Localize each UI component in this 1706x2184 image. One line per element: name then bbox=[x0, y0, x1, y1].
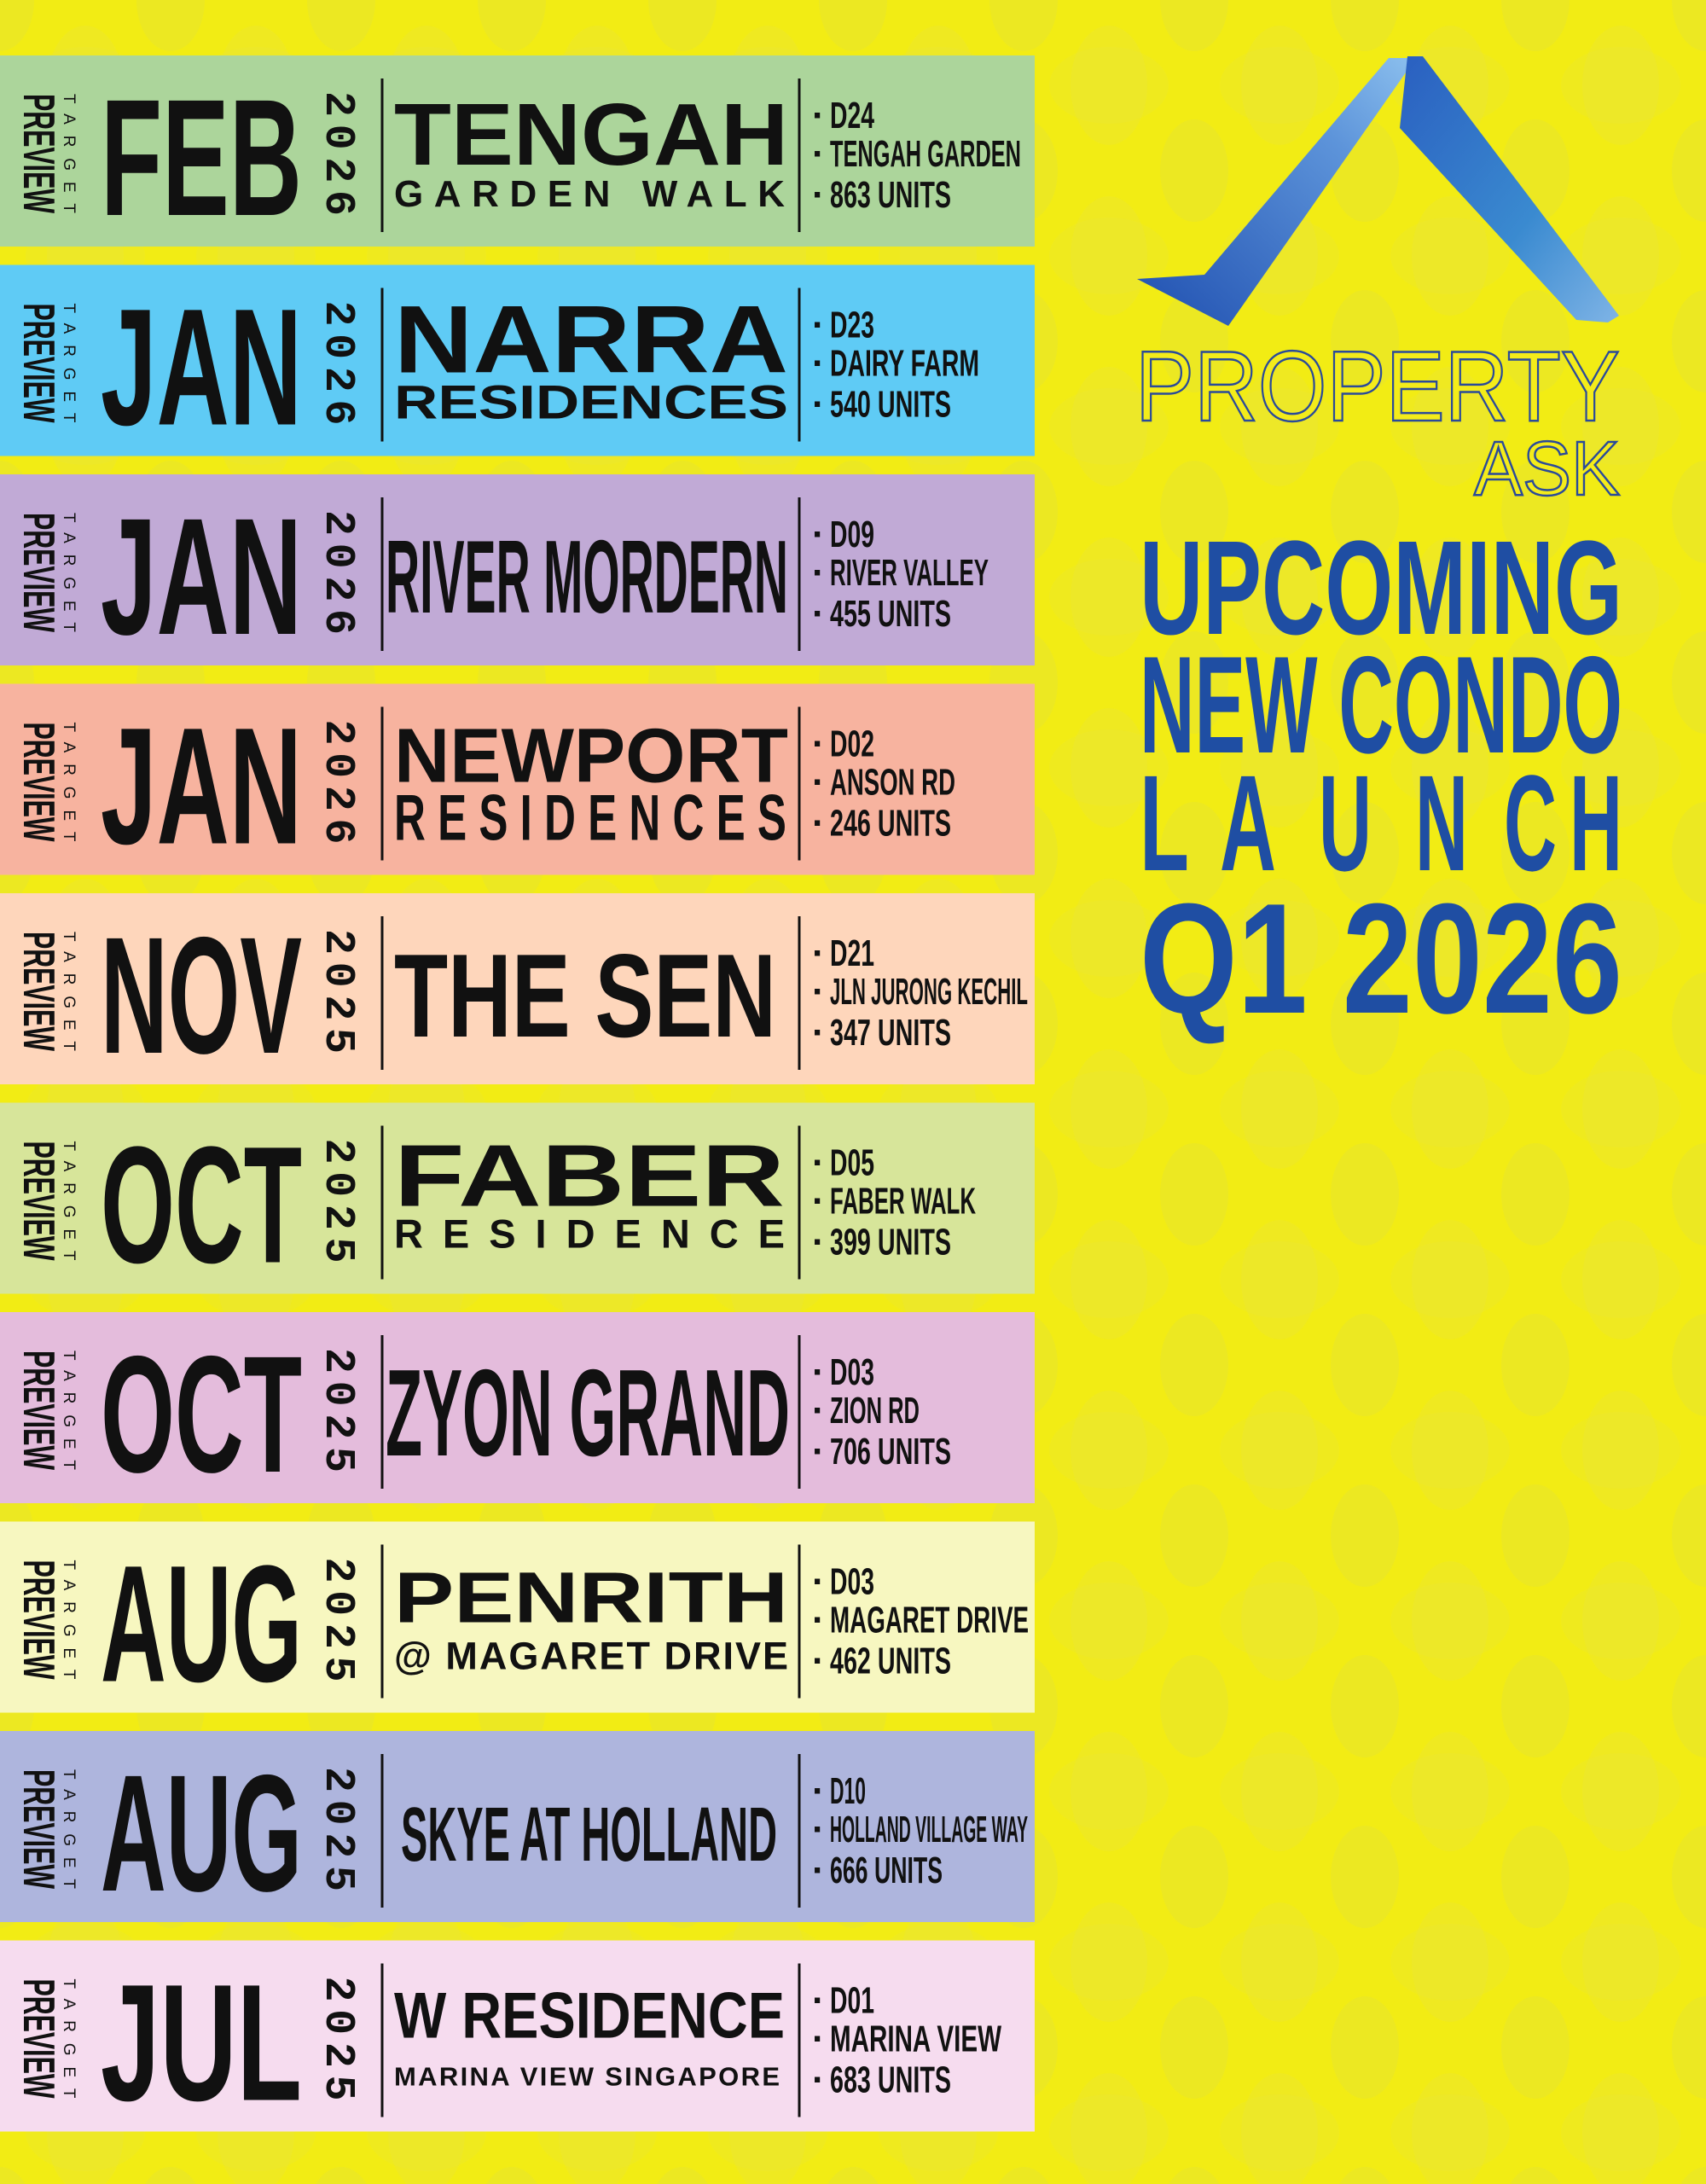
row: Skye at Holland: · bbox=[812, 1850, 825, 1891]
row: Newport Residences: ANSON RD bbox=[830, 761, 955, 804]
row: Skye at Holland: 666 UNITS bbox=[830, 1850, 943, 1891]
row: The Sen: · bbox=[812, 971, 825, 1013]
row: Narra Residences: 2026 bbox=[313, 300, 362, 425]
row: Newport Residences: · bbox=[812, 723, 825, 764]
row: Tengah Garden Walk: D24 bbox=[830, 95, 874, 136]
row: Penrith: @ MAGARET DRIVE bbox=[394, 1635, 788, 1677]
row: Penrith: · bbox=[812, 1640, 825, 1682]
row: Faber Residence: FABER bbox=[394, 1126, 785, 1225]
row: W Residence: TARGET bbox=[60, 1979, 78, 2099]
row: Tengah Garden Walk: · bbox=[812, 133, 825, 175]
headline: H bbox=[1570, 746, 1622, 899]
row: W Residence: · bbox=[812, 2059, 825, 2100]
row: Newport Residences: JAN bbox=[101, 693, 302, 879]
row: W Residence: 2025 bbox=[313, 1976, 362, 2100]
row: Penrith: MAGARET DRIVE bbox=[830, 1599, 1029, 1641]
row: W Residence: PREVIEW bbox=[14, 1979, 63, 2099]
row: Faber Residence: OCT bbox=[101, 1112, 302, 1298]
row: Newport Residences: TARGET bbox=[60, 722, 78, 842]
row: Zyon Grand: OCT bbox=[101, 1321, 302, 1507]
row: W Residence: JUL bbox=[101, 1950, 302, 2136]
row: W Residence: · bbox=[812, 2018, 825, 2059]
row: Skye at Holland: PREVIEW bbox=[14, 1769, 63, 1890]
row: Zyon Grand: ZYON GRAND bbox=[386, 1344, 790, 1482]
row: Zyon Grand bbox=[0, 1312, 1035, 1507]
row: Zyon Grand: ZION RD bbox=[830, 1390, 920, 1432]
row: Narra Residences bbox=[0, 264, 1035, 461]
headline: L bbox=[1140, 746, 1189, 899]
row: Newport Residences: R E S I D E N C E S bbox=[394, 781, 786, 855]
row: River Mordern: · bbox=[812, 593, 825, 635]
row: W Residence: D01 bbox=[830, 1979, 874, 2022]
row: The Sen: PREVIEW bbox=[14, 932, 63, 1052]
logo text: PROPERTY ASK: PROPERTY bbox=[1135, 330, 1620, 442]
row: Newport Residences: 246 UNITS bbox=[830, 802, 951, 845]
row: Skye at Holland: D10 bbox=[830, 1770, 866, 1812]
row: Penrith: · bbox=[812, 1599, 825, 1641]
row: River Mordern bbox=[0, 474, 1035, 670]
row: Narra Residences: · bbox=[812, 304, 825, 346]
row: Zyon Grand: · bbox=[812, 1390, 825, 1432]
row: River Mordern: D09 bbox=[830, 514, 874, 555]
row: Tengah Garden Walk: 863 UNITS bbox=[830, 174, 951, 216]
row: The Sen bbox=[0, 893, 1035, 1089]
row: River Mordern: PREVIEW bbox=[14, 513, 63, 633]
row: Penrith: PENRITH bbox=[394, 1558, 788, 1638]
row: Zyon Grand: TARGET bbox=[60, 1350, 78, 1470]
row: Newport Residences bbox=[0, 684, 1035, 879]
row: The Sen: JLN JURONG KECHIL bbox=[830, 971, 1028, 1013]
row: W Residence: MARINA VIEW SINGAPORE bbox=[394, 2061, 780, 2092]
row: Tengah Garden Walk: TENGAH bbox=[394, 85, 788, 183]
headline bbox=[1140, 514, 1622, 1046]
row: Faber Residence bbox=[0, 1102, 1035, 1298]
headline: A bbox=[1220, 746, 1276, 899]
row: Faber Residence: RESIDENCE bbox=[394, 1211, 785, 1256]
row: The Sen: THE SEN bbox=[394, 930, 776, 1062]
row: Skye at Holland: 2025 bbox=[313, 1767, 362, 1891]
row: Newport Residences: D02 bbox=[830, 723, 874, 764]
row: Zyon Grand: · bbox=[812, 1431, 825, 1472]
row: Faber Residence: TARGET bbox=[60, 1141, 78, 1261]
row: W Residence: · bbox=[812, 1979, 825, 2022]
headline: N bbox=[1415, 746, 1468, 899]
row: Faber Residence: 399 UNITS bbox=[830, 1222, 951, 1263]
row: Faber Residence: · bbox=[812, 1181, 825, 1222]
row: River Mordern: RIVER MORDERN bbox=[386, 519, 788, 635]
row: Faber Residence: PREVIEW bbox=[14, 1141, 63, 1261]
row: Newport Residences: PREVIEW bbox=[14, 722, 63, 842]
row: W Residence: MARINA VIEW bbox=[830, 2018, 1001, 2059]
row: Narra Residences: 540 UNITS bbox=[830, 384, 951, 425]
row: Penrith: D03 bbox=[830, 1561, 874, 1602]
row: Zyon Grand: · bbox=[812, 1351, 825, 1393]
row: River Mordern: · bbox=[812, 552, 825, 594]
row: Tengah Garden Walk: · bbox=[812, 174, 825, 216]
row: Narra Residences: RESIDENCES bbox=[394, 375, 788, 428]
row: The Sen: NOV bbox=[101, 903, 302, 1089]
row: River Mordern: RIVER VALLEY bbox=[830, 552, 989, 594]
row: Narra Residences: D23 bbox=[830, 304, 874, 346]
row: Skye at Holland: · bbox=[812, 1809, 825, 1850]
row: Skye at Holland: · bbox=[812, 1770, 825, 1812]
row: Narra Residences: PREVIEW bbox=[14, 304, 63, 423]
row: Penrith bbox=[0, 1522, 1035, 1716]
logo text: PROPERTY ASK: ASK bbox=[1474, 427, 1620, 512]
row: The Sen: 2025 bbox=[313, 929, 362, 1054]
row: Tengah Garden Walk: · bbox=[812, 95, 825, 136]
row: Penrith: AUG bbox=[101, 1531, 302, 1716]
row: Penrith: · bbox=[812, 1561, 825, 1602]
row: Zyon Grand: 2025 bbox=[313, 1348, 362, 1472]
row: Tengah Garden Walk: FEB bbox=[101, 65, 302, 251]
row: Faber Residence: FABER WALK bbox=[830, 1181, 976, 1222]
row: The Sen: TARGET bbox=[60, 932, 78, 1051]
row: River Mordern: 455 UNITS bbox=[830, 593, 951, 635]
row: Tengah Garden Walk: 2026 bbox=[313, 91, 362, 216]
row: Faber Residence: D05 bbox=[830, 1141, 874, 1184]
row: Zyon Grand: D03 bbox=[830, 1351, 874, 1393]
row: W Residence bbox=[0, 1940, 1035, 2136]
row: Tengah Garden Walk bbox=[0, 55, 1035, 251]
text: HOLLAND VILLAGE WAY bbox=[830, 1809, 1028, 1850]
row: W Residence: 683 UNITS bbox=[830, 2059, 951, 2100]
row: Tengah Garden Walk: GARDEN WALK bbox=[394, 173, 785, 215]
row: Newport Residences: · bbox=[812, 761, 825, 804]
row: Faber Residence: 2025 bbox=[313, 1138, 362, 1263]
row: River Mordern: JAN bbox=[101, 484, 302, 670]
row: Penrith: 2025 bbox=[313, 1558, 362, 1682]
row: Penrith: PREVIEW bbox=[14, 1560, 63, 1680]
row: Tengah Garden Walk: TENGAH GARDEN bbox=[830, 133, 1021, 175]
row: Skye at Holland: AUG bbox=[101, 1740, 302, 1926]
headline: C bbox=[1504, 746, 1557, 899]
row: Narra Residences: TARGET bbox=[60, 304, 78, 423]
row: The Sen: · bbox=[812, 1012, 825, 1054]
row: W Residence: W RESIDENCE bbox=[394, 1979, 785, 2053]
row: Penrith: TARGET bbox=[60, 1560, 78, 1680]
row: River Mordern: 2026 bbox=[313, 510, 362, 635]
row: Faber Residence: · bbox=[812, 1222, 825, 1263]
row: The Sen: 347 UNITS bbox=[830, 1012, 951, 1054]
row: Skye at Holland: SKYE AT HOLLAND bbox=[401, 1792, 777, 1878]
row: Tengah Garden Walk: PREVIEW bbox=[14, 94, 63, 214]
row: Faber Residence: · bbox=[812, 1141, 825, 1184]
headline: U bbox=[1319, 746, 1372, 899]
row: Zyon Grand: PREVIEW bbox=[14, 1350, 63, 1471]
row: Skye at Holland bbox=[0, 1731, 1035, 1926]
row: The Sen: · bbox=[812, 932, 825, 974]
row: Narra Residences: · bbox=[812, 343, 825, 384]
row: Zyon Grand: 706 UNITS bbox=[830, 1431, 951, 1472]
logo text: PROPERTY ASK bbox=[1135, 330, 1620, 512]
row: River Mordern: TARGET bbox=[60, 513, 78, 632]
row: Newport Residences: NEWPORT bbox=[394, 713, 788, 799]
row: Penrith: 462 UNITS bbox=[830, 1640, 951, 1682]
row: River Mordern: · bbox=[812, 514, 825, 555]
row: Narra Residences: JAN bbox=[101, 275, 302, 461]
row: Narra Residences: · bbox=[812, 384, 825, 425]
row: Newport Residences: · bbox=[812, 802, 825, 845]
row: Narra Residences: NARRA bbox=[394, 287, 788, 392]
row: The Sen: D21 bbox=[830, 932, 874, 974]
row: Tengah Garden Walk: TARGET bbox=[60, 94, 78, 213]
logo: roof chevron bbox=[1137, 56, 1619, 326]
row: Narra Residences: DAIRY FARM bbox=[830, 343, 979, 384]
row: Skye at Holland: TARGET bbox=[60, 1769, 78, 1889]
row: Newport Residences: 2026 bbox=[313, 720, 362, 845]
